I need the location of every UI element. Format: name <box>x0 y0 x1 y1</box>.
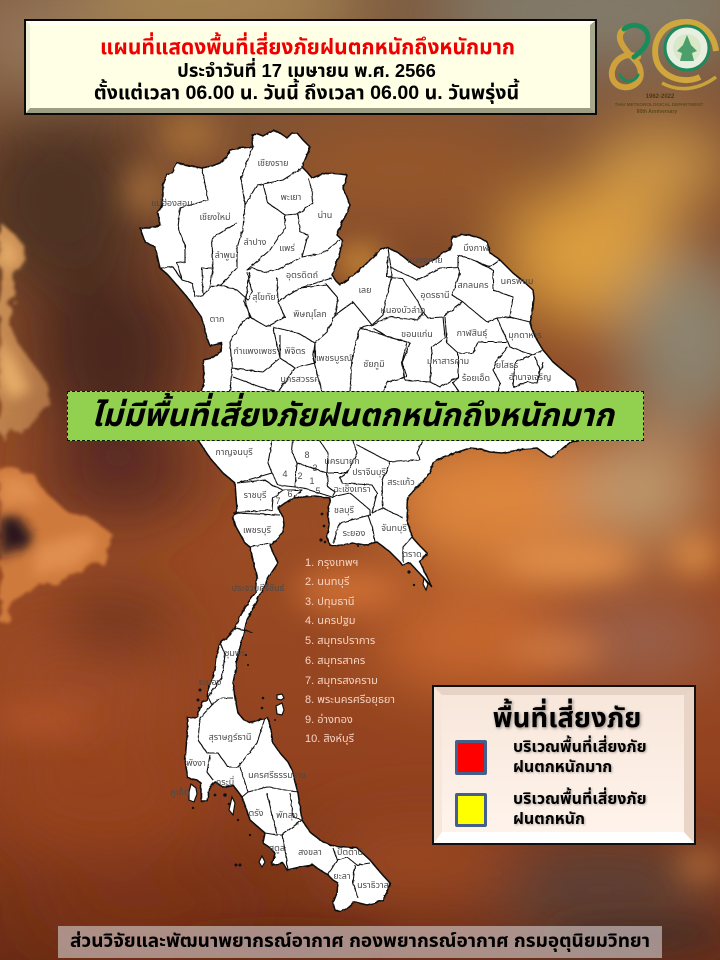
footer credit bar <box>58 926 662 958</box>
province labels: นครศรีธรรมราช <box>248 770 306 780</box>
province labels: ลำพูน <box>215 250 235 261</box>
province labels: อำนาจเจริญ <box>509 372 551 382</box>
province borders <box>160 147 543 898</box>
province labels: เชียงราย <box>257 158 289 168</box>
island: Ko Samui <box>276 694 284 715</box>
wave tail <box>662 77 716 89</box>
country outline <box>140 130 578 912</box>
left cumulus clouds <box>0 222 113 625</box>
province labels: ชัยภูมิ <box>363 359 385 370</box>
seal figure <box>673 34 701 62</box>
province labels: สระแก้ว <box>387 477 415 487</box>
province labels: ภูเก็ต <box>170 787 190 798</box>
province labels: พิษณุโลก <box>293 309 327 319</box>
label: heavy: ฝนตกหนัก <box>513 811 585 828</box>
province labels: พังงา <box>186 758 206 768</box>
province labels: ประจวบคีรีขันธ์ <box>232 583 285 593</box>
province labels: นครสวรรค์ <box>280 374 320 384</box>
province labels: 5 <box>315 486 321 496</box>
bangkok region numbered list: 3. ปทุมธานี <box>305 596 355 608</box>
footer text: ส่วนวิจัยและพัฒนาพยากรณ์อากาศ กองพยากรณ์อากาศ กรมอุตุนิยมวิทยา <box>70 931 650 952</box>
province labels: ยะลา <box>333 871 351 881</box>
banner text: ไม่มีพื้นที่เสี่ยงภัยฝนตกหนักถึงหนักมาก <box>91 397 614 433</box>
bangkok region numbered list: 6. สมุทรสาคร <box>305 655 365 667</box>
province labels: 8 <box>304 450 310 460</box>
title line: แผนที่แสดงพื้นที่เสี่ยงภัยฝนตกหนักถึงหนักมาก <box>100 36 515 59</box>
province labels: ตราด <box>402 549 422 559</box>
province labels: เพชรบุรี <box>243 525 272 535</box>
province labels: อุดรธานี <box>420 290 450 300</box>
province labels: ราชบุรี <box>244 490 267 500</box>
province labels: กาฬสินธุ์ <box>457 328 487 338</box>
bangkok region numbered list: 9. อ่างทอง <box>305 713 353 726</box>
title panel <box>24 19 597 115</box>
bangkok region numbered list: 2. นนทบุรี <box>305 576 350 588</box>
bangkok region numbered list: 7. สมุทรสงคราม <box>305 675 378 687</box>
small black islets <box>192 513 415 866</box>
province labels: จันทบุรี <box>381 523 407 533</box>
label: heavy-very heavy: ฝนตกหนักมาก <box>513 759 612 776</box>
province labels: แพร่ <box>279 243 295 253</box>
bangkok region numbered list: 4. นครปฐม <box>305 615 356 627</box>
swatch: yellow <box>455 793 487 827</box>
validity period line: ตั้งแต่เวลา 06.00 น. วันนี้ ถึงเวลา 06.00 น. วันพรุ่งนี้ <box>94 82 519 104</box>
province labels: กาญจนบุรี <box>215 447 253 457</box>
province labels: ตาก <box>210 314 224 324</box>
bangkok region numbered list <box>305 557 395 745</box>
seal deity <box>677 35 697 61</box>
province labels: ขอนแก่น <box>401 329 433 339</box>
province labels: กำแพงเพชร <box>233 346 277 356</box>
label: heavy: บริเวณพื้นที่เสี่ยงภัย <box>513 791 647 808</box>
province labels: ชลบุรี <box>334 505 355 515</box>
province labels: ร้อยเอ็ด <box>462 373 490 383</box>
bangkok region numbered list: 1. กรุงเทพฯ <box>305 557 358 569</box>
province labels: เลย <box>358 285 372 295</box>
province labels: มหาสารคาม <box>427 356 469 366</box>
province labels: พัทลุง <box>276 810 298 820</box>
province labels: 3 <box>312 463 318 473</box>
province labels: ฉะเชิงเทรา <box>334 484 370 494</box>
province labels: อุตรดิตถ์ <box>286 270 318 280</box>
province labels: 4 <box>282 469 288 479</box>
province labels: เชียงใหม่ <box>199 212 231 222</box>
legend heading: พื้นที่เสี่ยงภัย <box>493 702 641 733</box>
province labels: กระบี่ <box>216 775 234 787</box>
province labels: นครนายก <box>324 456 360 466</box>
province labels: ยโสธร <box>496 360 519 370</box>
province labels: หนองคาย <box>407 255 443 265</box>
figure eight <box>612 25 648 87</box>
department name: THAI METEOROLOGICAL DEPARTMENT <box>615 102 704 107</box>
province labels: นครพนม <box>501 276 533 286</box>
bangkok region numbered list: 10. สิงห์บุรี <box>305 733 355 745</box>
date line: ประจำวันที่ 17 เมษายน พ.ศ. 2566 <box>177 60 436 81</box>
province labels: 6 <box>287 489 293 499</box>
label: heavy-very heavy: บริเวณพื้นที่เสี่ยงภัย <box>513 739 647 756</box>
status banner <box>67 391 644 441</box>
department seal <box>665 26 709 70</box>
legend bevel <box>434 687 694 843</box>
province labels: 2 <box>297 471 303 481</box>
province labels: นราธิวาส <box>357 880 389 890</box>
province labels: เพชรบูรณ์ <box>316 353 352 364</box>
bangkok region numbered list: 8. พระนครศรีอยุธยา <box>305 694 395 706</box>
swatch: red <box>455 740 487 775</box>
province labels: บึงกาฬ <box>463 243 489 253</box>
province labels: ชุมพร <box>224 648 246 658</box>
province labels: น่าน <box>318 210 332 220</box>
cloud highlights and shadow <box>0 238 100 575</box>
label: heavy-very heavy <box>513 735 648 776</box>
province labels: ปัตตานี <box>337 847 363 857</box>
province labels: สุราษฎร์ธานี <box>209 732 251 742</box>
province labels: สงขลา <box>298 847 322 857</box>
province labels: สตูล <box>269 843 285 854</box>
province labels: สกลนคร <box>457 280 489 290</box>
islands and reefs <box>189 578 428 867</box>
logo: 80th anniversary emblem <box>608 18 719 115</box>
panel bevel <box>26 21 595 113</box>
bangkok region numbered list: 5. สมุทรปราการ <box>305 635 375 647</box>
province labels: หนองบัวลำภู <box>381 305 426 316</box>
province labels <box>151 158 551 890</box>
province labels: ระนอง <box>199 677 222 687</box>
anniversary: 80th Anniversary <box>637 109 677 115</box>
years: 1962-2022 <box>646 94 675 100</box>
province labels: พะเยา <box>281 192 301 202</box>
province labels: มุกดาหาร <box>508 330 542 340</box>
label: heavy <box>513 787 648 828</box>
province labels: ลำปาง <box>244 237 267 247</box>
province labels: พิจิตร <box>284 346 306 356</box>
province labels: ปราจีนบุรี <box>352 467 386 477</box>
province labels: แม่ฮ่องสอน <box>151 198 193 208</box>
province labels: 1 <box>309 476 315 486</box>
province labels: 7 <box>275 496 281 506</box>
province labels: สุโขทัย <box>252 292 276 302</box>
province labels: ระยอง <box>343 528 366 538</box>
legend panel <box>432 685 696 845</box>
province labels: ตรัง <box>249 808 264 818</box>
gold ring <box>655 22 716 80</box>
